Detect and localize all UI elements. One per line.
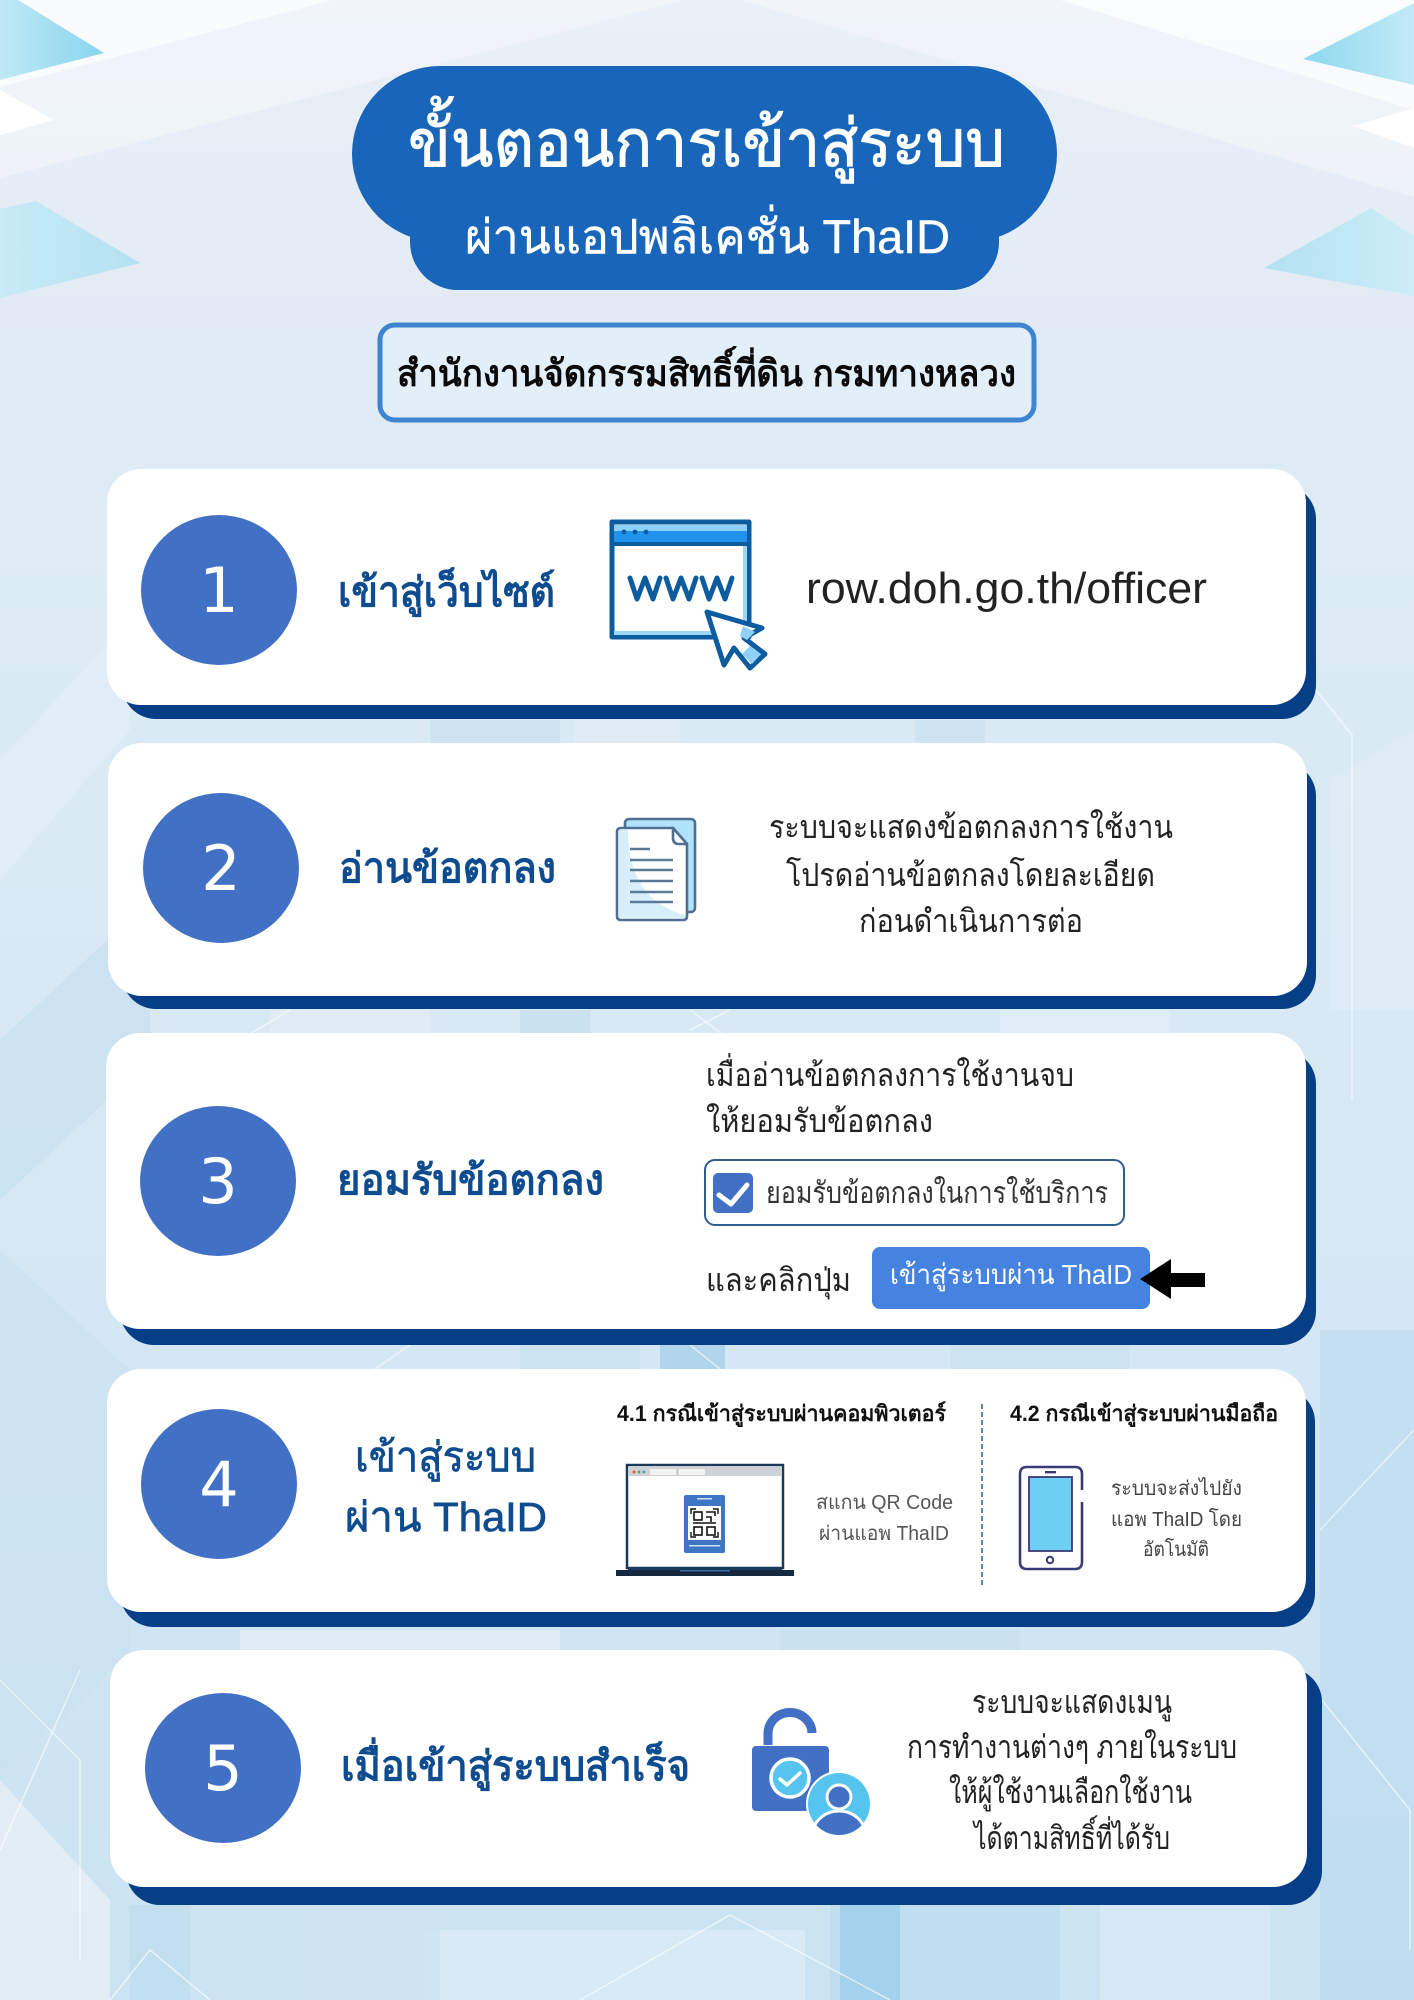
step 1 url: row.doh.go.th/officer: [806, 564, 1207, 613]
panel: step 2: [108, 743, 1316, 1009]
case 4.1 text: สแกน QR Code: [816, 1492, 953, 1514]
step 5 description: ระบบจะแสดงเมนู: [972, 1684, 1172, 1722]
step 3 number: [140, 1106, 296, 1256]
step 1 number: 1: [199, 554, 239, 627]
step 3 number: 3: [198, 1145, 238, 1218]
step 5 number: [145, 1693, 301, 1843]
step 5 heading: เมื่อเข้าสู่ระบบสำเร็จ: [341, 1737, 690, 1792]
step 5 description: การทำงานต่างๆ ภายในระบบ: [907, 1729, 1237, 1765]
step 2 heading: อ่านข้อตกลง: [339, 845, 556, 891]
step 5 description: ให้ผู้ใช้งานเลือกใช้งาน: [949, 1774, 1192, 1812]
step 1 heading: เข้าสู่เว็บไซต์: [338, 567, 555, 618]
panel: step 1: [107, 469, 1316, 719]
step 5 number: 5: [203, 1732, 243, 1805]
panel: step 3: [106, 1033, 1316, 1345]
case 4.1 text: ผ่านแอพ ThaID: [819, 1523, 949, 1545]
arrow: [1140, 1259, 1205, 1299]
button: login via ThaID: เข้าสู่ระบบผ่าน ThaID: [890, 1259, 1132, 1292]
subtitle box: [380, 325, 1034, 420]
step 2 description: ก่อนดำเนินการต่อ: [859, 903, 1083, 939]
icon: laptop with QR code: [616, 1465, 794, 1576]
case 4.2 text: อัตโนมัติ: [1143, 1538, 1209, 1561]
case 4.2 text: ระบบจะส่งไปยัง: [1111, 1477, 1242, 1500]
case 4.2 heading: 4.2 กรณีเข้าสู่ระบบผ่านมือถือ: [1010, 1401, 1278, 1428]
step 3 description: [706, 1053, 1074, 1139]
click label: และคลิกปุ่ม: [706, 1262, 851, 1300]
title pill: [352, 66, 1057, 290]
case 4.1 text: [816, 1492, 953, 1545]
step 2 description: โปรดอ่านข้อตกลงโดยละเอียด: [786, 857, 1155, 893]
step 4 heading: [345, 1434, 547, 1540]
title line 2: ผ่านแอปพลิเคชั่น ThaID: [465, 204, 950, 263]
icon: mobile phone: [1020, 1467, 1082, 1569]
step 2 description: ระบบจะแสดงข้อตกลงการใช้งาน: [769, 809, 1173, 845]
step 2 description: [769, 809, 1173, 939]
step 4 number: 4: [199, 1448, 239, 1521]
panel: step 4: [107, 1369, 1315, 1627]
checkbox row: ยอมรับข้อตกลงในการใช้บริการ: [766, 1176, 1108, 1210]
case 4.1 heading: 4.1 กรณีเข้าสู่ระบบผ่านคอมพิวเตอร์: [617, 1401, 946, 1428]
panel: step 5: [110, 1650, 1322, 1905]
step 2 number: [143, 793, 299, 943]
step 3 description: เมื่ออ่านข้อตกลงการใช้งานจบ: [706, 1053, 1074, 1093]
step 3 description: ให้ยอมรับข้อตกลง: [706, 1103, 933, 1139]
step 5 description: [907, 1684, 1237, 1856]
icon: www browser with cursor: [612, 522, 765, 668]
button: login via ThaID: [872, 1247, 1150, 1309]
case 4.2 text: [1111, 1477, 1242, 1561]
subtitle box: สำนักงานจัดกรรมสิทธิ์ที่ดิน กรมทางหลวง: [397, 346, 1016, 394]
step 5 description: ได้ตามสิทธิ์ที่ได้รับ: [972, 1815, 1170, 1856]
step 4 heading: เข้าสู่ระบบ: [355, 1434, 536, 1482]
checkbox row: [705, 1160, 1124, 1225]
icon: documents: [617, 819, 695, 920]
icon: unlocked padlock with user: [752, 1708, 870, 1835]
step 4 heading: ผ่าน ThaID: [345, 1494, 547, 1540]
step 3 heading: ยอมรับข้อตกลง: [337, 1157, 604, 1203]
step 1 number: [141, 515, 297, 665]
case 4.2 text: แอพ ThaID โดย: [1111, 1508, 1242, 1531]
title line 1: ขั้นตอนการเข้าสู่ระบบ: [408, 96, 1005, 184]
step 4 number: [141, 1409, 297, 1559]
step 2 number: 2: [201, 832, 241, 905]
